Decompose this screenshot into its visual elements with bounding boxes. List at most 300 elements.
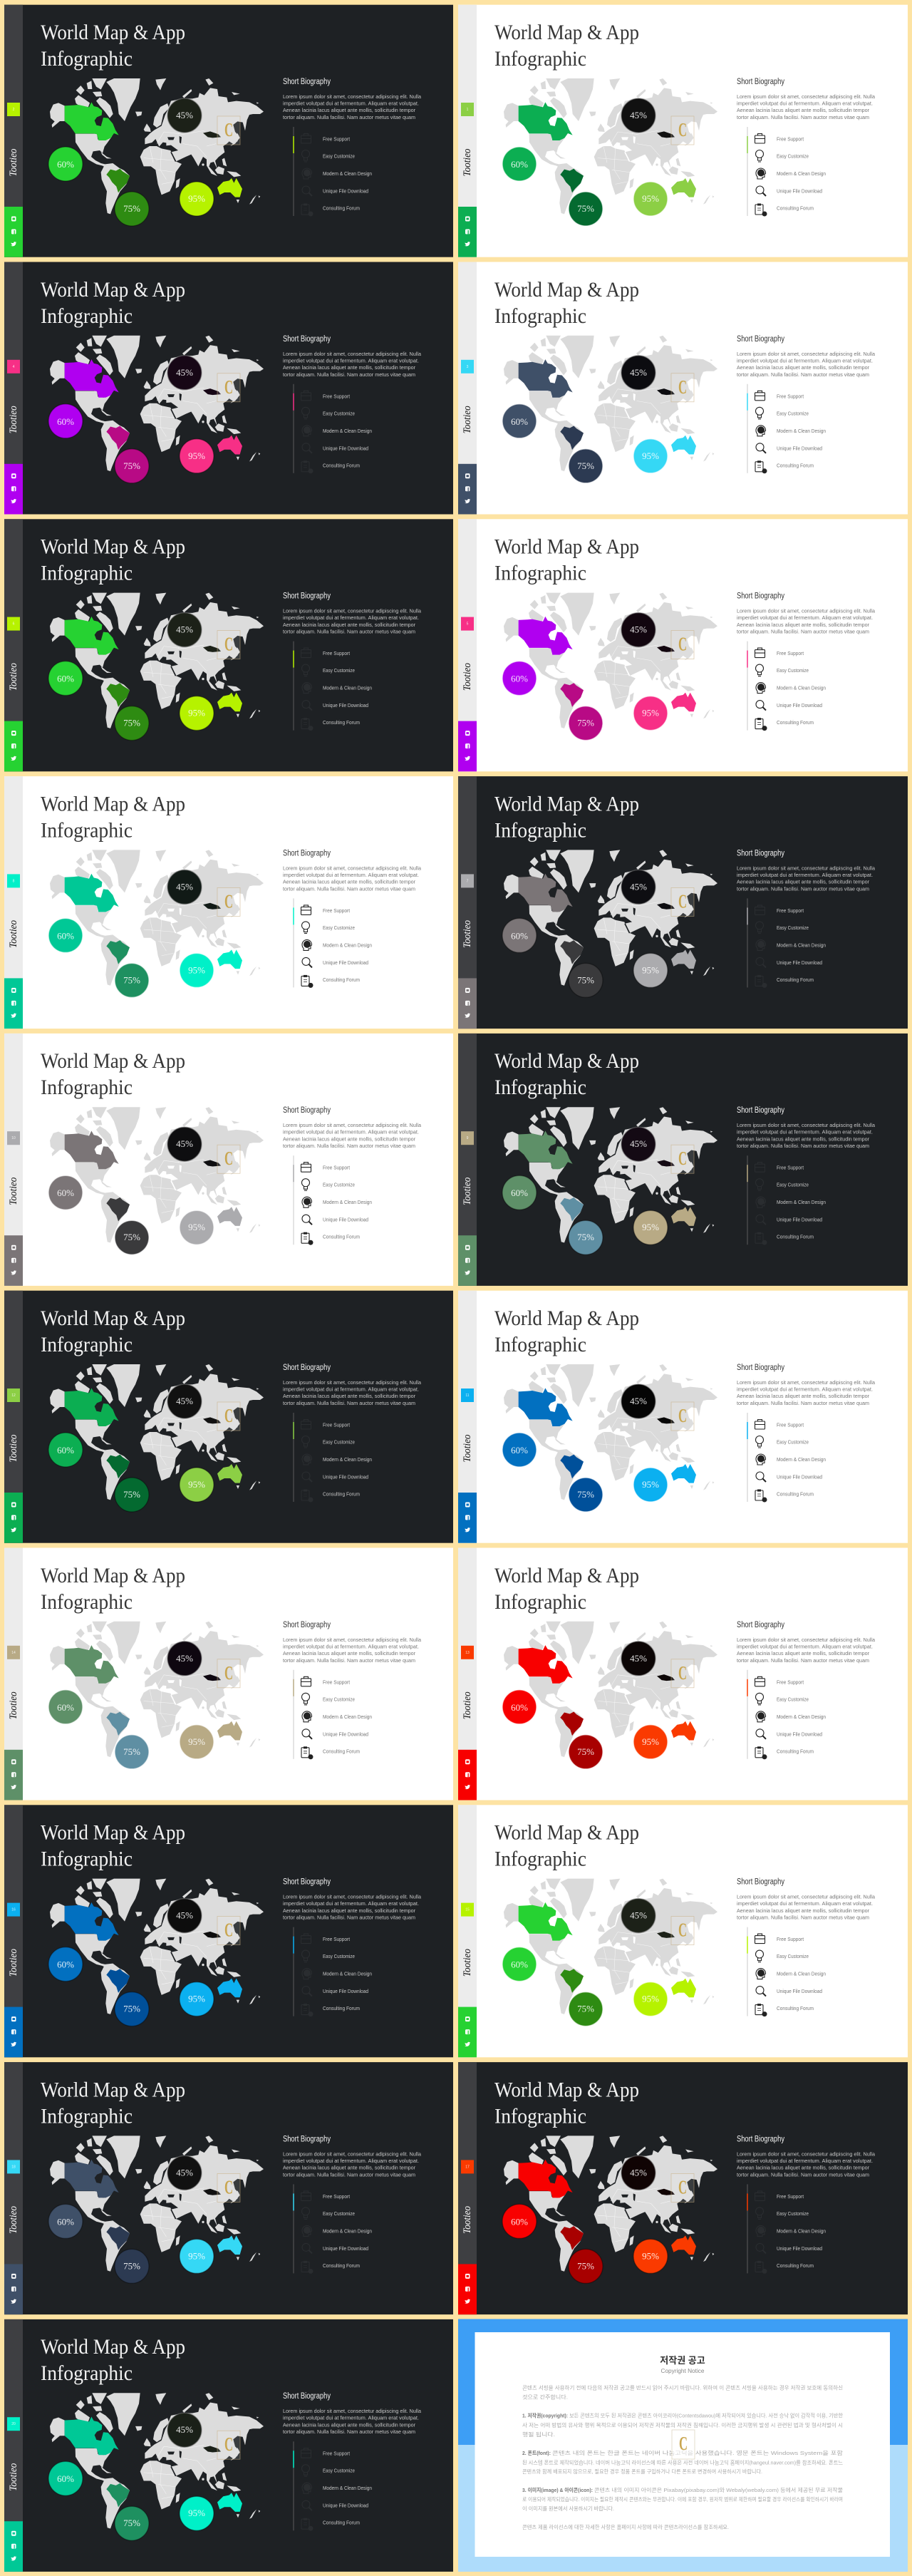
title: Infographic [41, 562, 133, 585]
short biography: tortor aliquam. Nulla facilisi. Nam auctor metus vitae quam [283, 2428, 415, 2435]
short biography: tortor aliquam. Nulla facilisi. Nam auctor metus vitae quam [283, 2171, 415, 2178]
panel: slide 11 dark green [4, 1291, 453, 1543]
percentage circles: 45% [630, 1910, 647, 1921]
short biography: Lorem ipsum dolor sit amet, consectetur adipiscing elit. Nulla [737, 865, 875, 871]
percentage circles: 60% [511, 1187, 528, 1198]
short biography: Short Biography [737, 2135, 784, 2143]
short biography: Lorem ipsum dolor sit amet, consectetur adipiscing elit. Nulla [283, 1122, 421, 1128]
percentage circles: 95% [188, 2250, 205, 2261]
short biography: imperdiet volutpat dui at fermentum. Aliquam erat volutpat. [283, 357, 419, 364]
panel: slide 14 light red [458, 1548, 908, 1800]
copyright body text: 콘텐츠 내의 폰트는 한글 폰트는 네이버 나눔고딕을 사용했습니다. 영문 폰트는 Windows System을 포함 [552, 2449, 843, 2456]
title [494, 1821, 639, 1871]
percentage circles [502, 613, 668, 741]
feature list: Modern & Clean Design [777, 170, 826, 177]
feature list: Consulting Forum [777, 2005, 814, 2011]
short biography: imperdiet volutpat dui at fermentum. Aliquam erat volutpat. [283, 1643, 419, 1649]
percentage circles: 45% [630, 1396, 647, 1406]
short biography: Short Biography [283, 2392, 331, 2401]
percentage circles: 45% [176, 881, 193, 892]
percentage circles [48, 2413, 214, 2540]
title [41, 1564, 185, 1614]
feature list: Easy Customize [323, 1953, 355, 1959]
title [494, 792, 639, 842]
feature list: Consulting Forum [777, 205, 814, 211]
feature list [747, 642, 826, 731]
short biography [737, 78, 875, 120]
feature list: Unique File Download [323, 2503, 368, 2509]
short biography [737, 592, 875, 635]
short biography: Short Biography [737, 1106, 784, 1115]
percentage circles: 95% [642, 450, 659, 461]
percentage circles: 75% [577, 2260, 594, 2271]
watermark: C [679, 2433, 688, 2454]
percentage circles: 75% [123, 2260, 140, 2271]
title: World Map & App [494, 1821, 639, 1845]
title: Infographic [41, 1333, 133, 1356]
feature list: Free Support [777, 1679, 804, 1685]
percentage circles: 60% [57, 2216, 74, 2227]
percentage circles [502, 2155, 668, 2283]
title: World Map & App [494, 1049, 639, 1073]
title: Infographic [41, 2361, 133, 2385]
sidebar: 12 [11, 1393, 16, 1398]
short biography: Lorem ipsum dolor sit amet, consectetur adipiscing elit. Nulla [283, 1637, 421, 1643]
title [494, 2078, 639, 2128]
sidebar: 4 [13, 365, 15, 369]
short biography: Aenean lacinia lacus aliquet ante mollis, sollicitudin tempor [283, 107, 416, 113]
feature list: Unique File Download [323, 2245, 368, 2252]
copyright body text: 것으로 간주합니다. [522, 2394, 568, 2401]
feature list: Modern & Clean Design [777, 428, 826, 434]
feature list: Consulting Forum [777, 1748, 814, 1754]
sidebar [4, 1548, 23, 1800]
title: Infographic [494, 1076, 586, 1099]
feature list [747, 384, 826, 473]
percentage circles: 45% [630, 1138, 647, 1149]
percentage circles [502, 98, 668, 226]
short biography: Lorem ipsum dolor sit amet, consectetur adipiscing elit. Nulla [283, 1894, 421, 1900]
copyright body text: 된 시스템 폰트로 제작되었습니다. 네이버 나눔고딕 라이선스에 따른 사용은 사전 네이버 나눔고딕 홈페이지(hangeul.naver.com)를 참조하세요. 폰트느 [522, 2459, 843, 2466]
percentage circles [48, 1642, 214, 1769]
percentage circles: 75% [123, 974, 140, 985]
short biography: Short Biography [737, 592, 784, 601]
copyright body text [522, 2384, 843, 2530]
panel: slide 1 dark lime [4, 5, 453, 257]
feature list: Easy Customize [323, 1182, 355, 1188]
short biography: tortor aliquam. Nulla facilisi. Nam auctor metus vitae quam [283, 1400, 415, 1406]
percentage circles [48, 2155, 214, 2283]
feature list: Consulting Forum [323, 719, 360, 726]
percentage circles [502, 1384, 668, 1512]
short biography: tortor aliquam. Nulla facilisi. Nam auctor metus vitae quam [283, 114, 415, 120]
percentage circles: 45% [630, 2167, 647, 2178]
feature list: Unique File Download [777, 2245, 822, 2252]
feature list: Modern & Clean Design [777, 942, 826, 948]
short biography: Short Biography [737, 849, 784, 857]
short biography: Short Biography [283, 1621, 331, 1629]
feature list: Free Support [323, 907, 350, 914]
world map [504, 78, 717, 214]
feature list: Easy Customize [323, 410, 355, 416]
short biography: imperdiet volutpat dui at fermentum. Aliquam erat volutpat. [737, 872, 873, 878]
feature list: Free Support [323, 1936, 350, 1942]
panel: slide 17 dark slate [4, 2062, 453, 2314]
sidebar: Tootieo [462, 148, 473, 177]
short biography: Lorem ipsum dolor sit amet, consectetur adipiscing elit. Nulla [737, 1894, 875, 1900]
feature list: Easy Customize [777, 153, 809, 160]
sidebar: Tootieo [462, 1434, 473, 1463]
percentage circles: 75% [123, 203, 140, 214]
copyright body text: 행될 됩니다. [522, 2431, 555, 2438]
title: World Map & App [494, 21, 639, 44]
percentage circles: 95% [642, 2250, 659, 2261]
short biography: imperdiet volutpat dui at fermentum. Aliquam erat volutpat. [737, 100, 873, 107]
feature list [294, 384, 372, 473]
sidebar: Tootieo [8, 663, 19, 691]
title: World Map & App [494, 1307, 639, 1330]
short biography: Short Biography [283, 1106, 331, 1115]
percentage circles: 45% [176, 2424, 193, 2435]
world map [50, 336, 264, 471]
title: Infographic [494, 304, 586, 328]
title: World Map & App [41, 535, 185, 559]
short biography: tortor aliquam. Nulla facilisi. Nam auctor metus vitae quam [737, 1915, 869, 1921]
short biography: Aenean lacinia lacus aliquet ante mollis, sollicitudin tempor [283, 1650, 416, 1657]
title [494, 535, 639, 585]
short biography: Aenean lacinia lacus aliquet ante mollis, sollicitudin tempor [737, 622, 870, 628]
feature list: Easy Customize [777, 1438, 809, 1446]
percentage circles: 75% [577, 203, 594, 214]
feature list: Free Support [323, 1679, 350, 1685]
title: World Map & App [41, 278, 185, 302]
sidebar: 17 [465, 2165, 470, 2169]
copyright body text: 이 이미지를 원본에서 사용하시기 바랍니다. [522, 2505, 614, 2512]
short biography [283, 2135, 421, 2178]
percentage circles [502, 1127, 668, 1254]
feature list: Easy Customize [323, 2468, 355, 2474]
percentage circles: 45% [630, 624, 647, 635]
feature list: Consulting Forum [323, 1234, 360, 1240]
short biography [283, 1106, 421, 1149]
sidebar: Tootieo [462, 919, 473, 948]
short biography: Lorem ipsum dolor sit amet, consectetur adipiscing elit. Nulla [737, 93, 875, 100]
short biography: imperdiet volutpat dui at fermentum. Aliquam erat volutpat. [283, 1386, 419, 1393]
percentage circles [48, 1384, 214, 1512]
percentage circles: 95% [188, 1479, 205, 1490]
title: Infographic [41, 1590, 133, 1614]
percentage circles [48, 1127, 214, 1254]
percentage circles: 45% [176, 367, 193, 378]
copyright heading: 저작권 공고 [660, 2355, 705, 2366]
title: Infographic [41, 304, 133, 328]
sidebar: 9 [467, 1136, 469, 1140]
short biography: tortor aliquam. Nulla facilisi. Nam auctor metus vitae quam [283, 629, 415, 635]
feature list [747, 2184, 826, 2274]
feature list: Unique File Download [323, 1217, 368, 1223]
sidebar: 6 [13, 622, 15, 627]
percentage circles [48, 613, 214, 741]
short biography: Lorem ipsum dolor sit amet, consectetur adipiscing elit. Nulla [737, 351, 875, 357]
percentage circles: 95% [642, 708, 659, 718]
short biography [737, 2135, 875, 2178]
world map [504, 850, 717, 986]
short biography: tortor aliquam. Nulla facilisi. Nam auctor metus vitae quam [737, 1143, 869, 1149]
feature list: Consulting Forum [777, 977, 814, 983]
short biography: Lorem ipsum dolor sit amet, consectetur adipiscing elit. Nulla [283, 351, 421, 357]
feature list [747, 898, 826, 988]
feature list [294, 1670, 372, 1759]
short biography: tortor aliquam. Nulla facilisi. Nam auctor metus vitae quam [737, 114, 869, 120]
feature list: Easy Customize [323, 1438, 355, 1446]
feature list: Easy Customize [777, 1182, 809, 1188]
sidebar [4, 262, 23, 515]
feature list: Free Support [323, 393, 350, 399]
feature list: Free Support [323, 1165, 350, 1171]
short biography: tortor aliquam. Nulla facilisi. Nam auctor metus vitae quam [737, 2171, 869, 2178]
feature list [747, 1155, 826, 1245]
sidebar [458, 1805, 477, 2057]
percentage circles: 75% [123, 1232, 140, 1242]
feature list: Unique File Download [323, 1731, 368, 1737]
feature list: Easy Customize [777, 2210, 809, 2217]
feature list: Consulting Forum [323, 977, 360, 983]
percentage circles: 95% [188, 1736, 205, 1747]
percentage circles: 75% [123, 2518, 140, 2528]
panel: slide 6 light purple [458, 519, 908, 771]
percentage circles: 95% [642, 1222, 659, 1232]
feature list [294, 1413, 372, 1503]
sidebar: 11 [465, 1393, 470, 1398]
sidebar [458, 262, 477, 515]
short biography [737, 1621, 875, 1664]
feature list: Unique File Download [777, 445, 822, 451]
short biography: Aenean lacinia lacus aliquet ante mollis, sollicitudin tempor [283, 1393, 416, 1399]
percentage circles: 60% [511, 1702, 528, 1713]
short biography: imperdiet volutpat dui at fermentum. Aliquam erat volutpat. [737, 357, 873, 364]
sidebar [4, 519, 23, 771]
title: World Map & App [41, 2078, 185, 2101]
short biography: Lorem ipsum dolor sit amet, consectetur adipiscing elit. Nulla [283, 2150, 421, 2157]
feature list [294, 1927, 372, 2016]
short biography [283, 1878, 421, 1921]
title [494, 1307, 639, 1356]
short biography: imperdiet volutpat dui at fermentum. Aliquam erat volutpat. [283, 1129, 419, 1135]
title: World Map & App [494, 278, 639, 302]
sidebar [4, 776, 23, 1029]
title: World Map & App [494, 535, 639, 559]
percentage circles: 75% [577, 1489, 594, 1500]
percentage circles: 60% [511, 159, 528, 170]
title: Infographic [494, 2104, 586, 2128]
panel: slide 2 light green [458, 5, 908, 257]
sidebar: Tootieo [8, 2205, 19, 2234]
world map [504, 1622, 717, 1757]
sidebar: 20 [11, 2422, 16, 2426]
title [41, 1049, 185, 1099]
feature list: Free Support [323, 135, 350, 143]
percentage circles: 60% [57, 674, 74, 684]
feature list: Modern & Clean Design [323, 942, 372, 948]
panel: slide 7 light teal [4, 776, 453, 1029]
feature list: Easy Customize [323, 667, 355, 674]
sidebar: Tootieo [462, 1177, 473, 1205]
percentage circles: 60% [511, 930, 528, 941]
short biography [283, 849, 421, 892]
title: World Map & App [41, 2335, 185, 2359]
feature list: Free Support [777, 1165, 804, 1171]
short biography: imperdiet volutpat dui at fermentum. Aliquam erat volutpat. [283, 614, 419, 621]
percentage circles: 45% [176, 2167, 193, 2178]
title [494, 1564, 639, 1614]
short biography: Aenean lacinia lacus aliquet ante mollis, sollicitudin tempor [283, 879, 416, 885]
sidebar: Tootieo [8, 919, 19, 948]
short biography: Lorem ipsum dolor sit amet, consectetur adipiscing elit. Nulla [737, 1379, 875, 1386]
title [41, 1821, 185, 1871]
percentage circles: 45% [176, 1653, 193, 1664]
short biography: tortor aliquam. Nulla facilisi. Nam auctor metus vitae quam [737, 885, 869, 892]
feature list: Consulting Forum [323, 2520, 360, 2526]
feature list: Easy Customize [777, 667, 809, 674]
sidebar: Tootieo [462, 1691, 473, 1719]
feature list: Unique File Download [777, 1988, 822, 1994]
sidebar: Tootieo [462, 1949, 473, 1977]
feature list: Unique File Download [777, 1474, 822, 1480]
short biography [737, 1364, 875, 1406]
short biography [737, 335, 875, 378]
percentage circles [502, 356, 668, 483]
feature list: Easy Customize [777, 1696, 809, 1702]
short biography: Short Biography [737, 78, 784, 86]
feature list: Unique File Download [323, 702, 368, 709]
percentage circles: 95% [188, 2508, 205, 2518]
short biography: imperdiet volutpat dui at fermentum. Aliquam erat volutpat. [283, 100, 419, 107]
short biography: Short Biography [283, 849, 331, 857]
sidebar: 10 [11, 1136, 16, 1140]
sidebar: 5 [467, 622, 469, 627]
short biography: Aenean lacinia lacus aliquet ante mollis, sollicitudin tempor [737, 2165, 870, 2171]
short biography: tortor aliquam. Nulla facilisi. Nam auctor metus vitae quam [737, 1657, 869, 1664]
feature list: Modern & Clean Design [777, 1971, 826, 1977]
percentage circles: 75% [123, 460, 140, 471]
percentage circles: 95% [642, 1994, 659, 2004]
feature list: Unique File Download [323, 445, 368, 451]
percentage circles: 95% [642, 1736, 659, 1747]
sidebar [458, 519, 477, 771]
world map [504, 593, 717, 728]
percentage circles [502, 870, 668, 997]
percentage circles: 60% [57, 1702, 74, 1713]
sidebar [458, 776, 477, 1029]
short biography: Aenean lacinia lacus aliquet ante mollis, sollicitudin tempor [283, 622, 416, 628]
title [41, 535, 185, 585]
percentage circles: 60% [511, 2216, 528, 2227]
percentage circles: 75% [577, 1746, 594, 1757]
feature list: Modern & Clean Design [323, 1714, 372, 1720]
short biography: Short Biography [283, 1364, 331, 1372]
percentage circles: 60% [57, 159, 74, 170]
percentage circles: 95% [188, 450, 205, 461]
short biography: imperdiet volutpat dui at fermentum. Aliquam erat volutpat. [737, 1386, 873, 1393]
percentage circles: 95% [642, 964, 659, 975]
feature list [747, 1413, 826, 1503]
world map [504, 336, 717, 471]
short biography: Short Biography [737, 1364, 784, 1372]
title [41, 2078, 185, 2128]
percentage circles: 95% [642, 1479, 659, 1490]
short biography: Lorem ipsum dolor sit amet, consectetur adipiscing elit. Nulla [737, 1637, 875, 1643]
short biography: Lorem ipsum dolor sit amet, consectetur adipiscing elit. Nulla [283, 608, 421, 614]
title: Infographic [41, 1076, 133, 1099]
watermark [672, 2430, 695, 2459]
percentage circles: 75% [123, 1489, 140, 1500]
feature list: Easy Customize [323, 1696, 355, 1702]
title [494, 1049, 639, 1099]
sidebar [4, 2062, 23, 2314]
short biography: Aenean lacinia lacus aliquet ante mollis, sollicitudin tempor [737, 1650, 870, 1657]
feature list: Modern & Clean Design [323, 2485, 372, 2491]
percentage circles: 75% [123, 1746, 140, 1757]
percentage circles: 60% [57, 1445, 74, 1456]
percentage circles: 75% [577, 718, 594, 728]
feature list: Easy Customize [777, 1953, 809, 1959]
short biography: imperdiet volutpat dui at fermentum. Aliquam erat volutpat. [283, 872, 419, 878]
feature list: Modern & Clean Design [777, 1456, 826, 1463]
title: World Map & App [494, 1564, 639, 1587]
world map [504, 1107, 717, 1243]
percentage circles: 75% [577, 460, 594, 471]
title: Infographic [494, 1848, 586, 1871]
feature list: Free Support [777, 907, 804, 914]
feature list: Easy Customize [323, 924, 355, 931]
copyright body text: 콘텐츠 내의 이미지 아이콘은 Pixabay(pixabay.com)와 Webaly(webaly.com) 등에서 제공된 무료 저작물 [594, 2486, 843, 2493]
panel: slide 18 dark red [458, 2062, 908, 2314]
short biography: Aenean lacinia lacus aliquet ante mollis, sollicitudin tempor [737, 879, 870, 885]
feature list: Unique File Download [777, 1217, 822, 1223]
percentage circles: 95% [188, 1222, 205, 1232]
feature list: Unique File Download [777, 188, 822, 194]
world map [50, 1622, 264, 1757]
short biography: imperdiet volutpat dui at fermentum. Aliquam erat volutpat. [737, 614, 873, 621]
feature list: Consulting Forum [323, 1748, 360, 1754]
sidebar: Tootieo [462, 406, 473, 433]
world map [504, 2135, 717, 2272]
sidebar: Tootieo [462, 663, 473, 691]
sidebar [458, 1034, 477, 1286]
short biography: Aenean lacinia lacus aliquet ante mollis, sollicitudin tempor [737, 1907, 870, 1914]
sidebar: Tootieo [8, 1691, 19, 1719]
feature list [747, 1927, 826, 2016]
percentage circles: 75% [577, 1232, 594, 1242]
percentage circles: 95% [188, 708, 205, 718]
feature list: Modern & Clean Design [323, 1199, 372, 1205]
sidebar: Tootieo [8, 406, 19, 433]
title [41, 278, 185, 328]
title [494, 21, 639, 71]
feature list: Unique File Download [323, 1988, 368, 1994]
short biography [283, 592, 421, 635]
feature list [294, 127, 372, 217]
sidebar: Tootieo [8, 1434, 19, 1463]
short biography: imperdiet volutpat dui at fermentum. Aliquam erat volutpat. [283, 1900, 419, 1907]
feature list: Consulting Forum [777, 2262, 814, 2269]
feature list: Free Support [777, 1421, 804, 1428]
feature list: Easy Customize [323, 2210, 355, 2217]
feature list: Modern & Clean Design [777, 685, 826, 691]
world map [50, 850, 264, 986]
short biography: tortor aliquam. Nulla facilisi. Nam auctor metus vitae quam [737, 371, 869, 378]
short biography [737, 1106, 875, 1149]
